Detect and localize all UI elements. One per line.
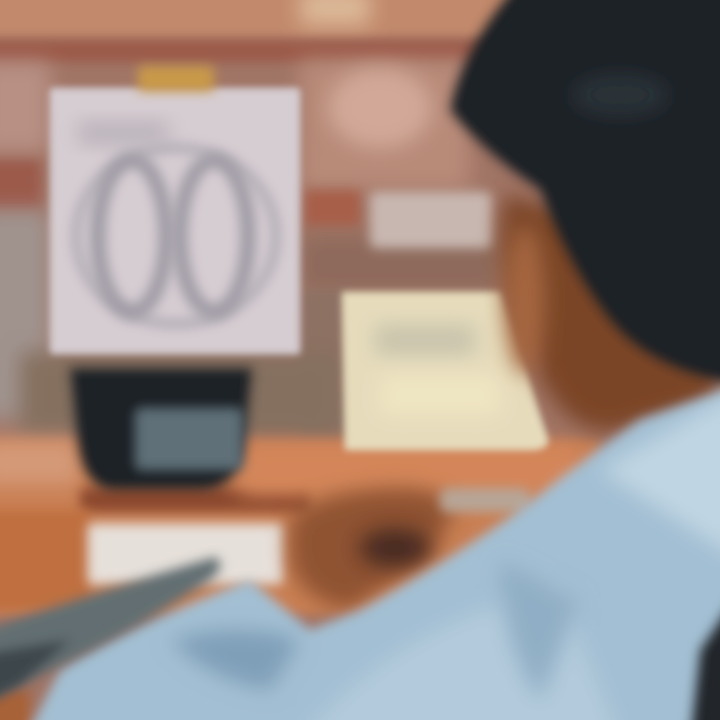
hair highlight [570, 73, 670, 117]
poster heading smudge [78, 122, 168, 144]
face and neck [501, 195, 720, 431]
hand [290, 488, 455, 610]
grey cuff [440, 488, 530, 512]
cheek highlight [505, 225, 545, 375]
outer ring around ovals [76, 148, 276, 324]
left oval ring [98, 160, 166, 312]
cream notepaper [342, 292, 548, 450]
dark hair [450, 0, 720, 385]
pale wall patch [328, 68, 432, 148]
dark chair corner [690, 590, 720, 720]
poster on wall [50, 66, 300, 354]
desk surface [0, 440, 600, 720]
light blue shirt [25, 385, 720, 720]
white paper on desk [88, 524, 283, 584]
dark cup [70, 368, 252, 490]
dark pen or tool [0, 557, 220, 705]
right oval ring [180, 160, 248, 312]
small grey sign [370, 192, 492, 248]
yellow clip [138, 66, 214, 92]
